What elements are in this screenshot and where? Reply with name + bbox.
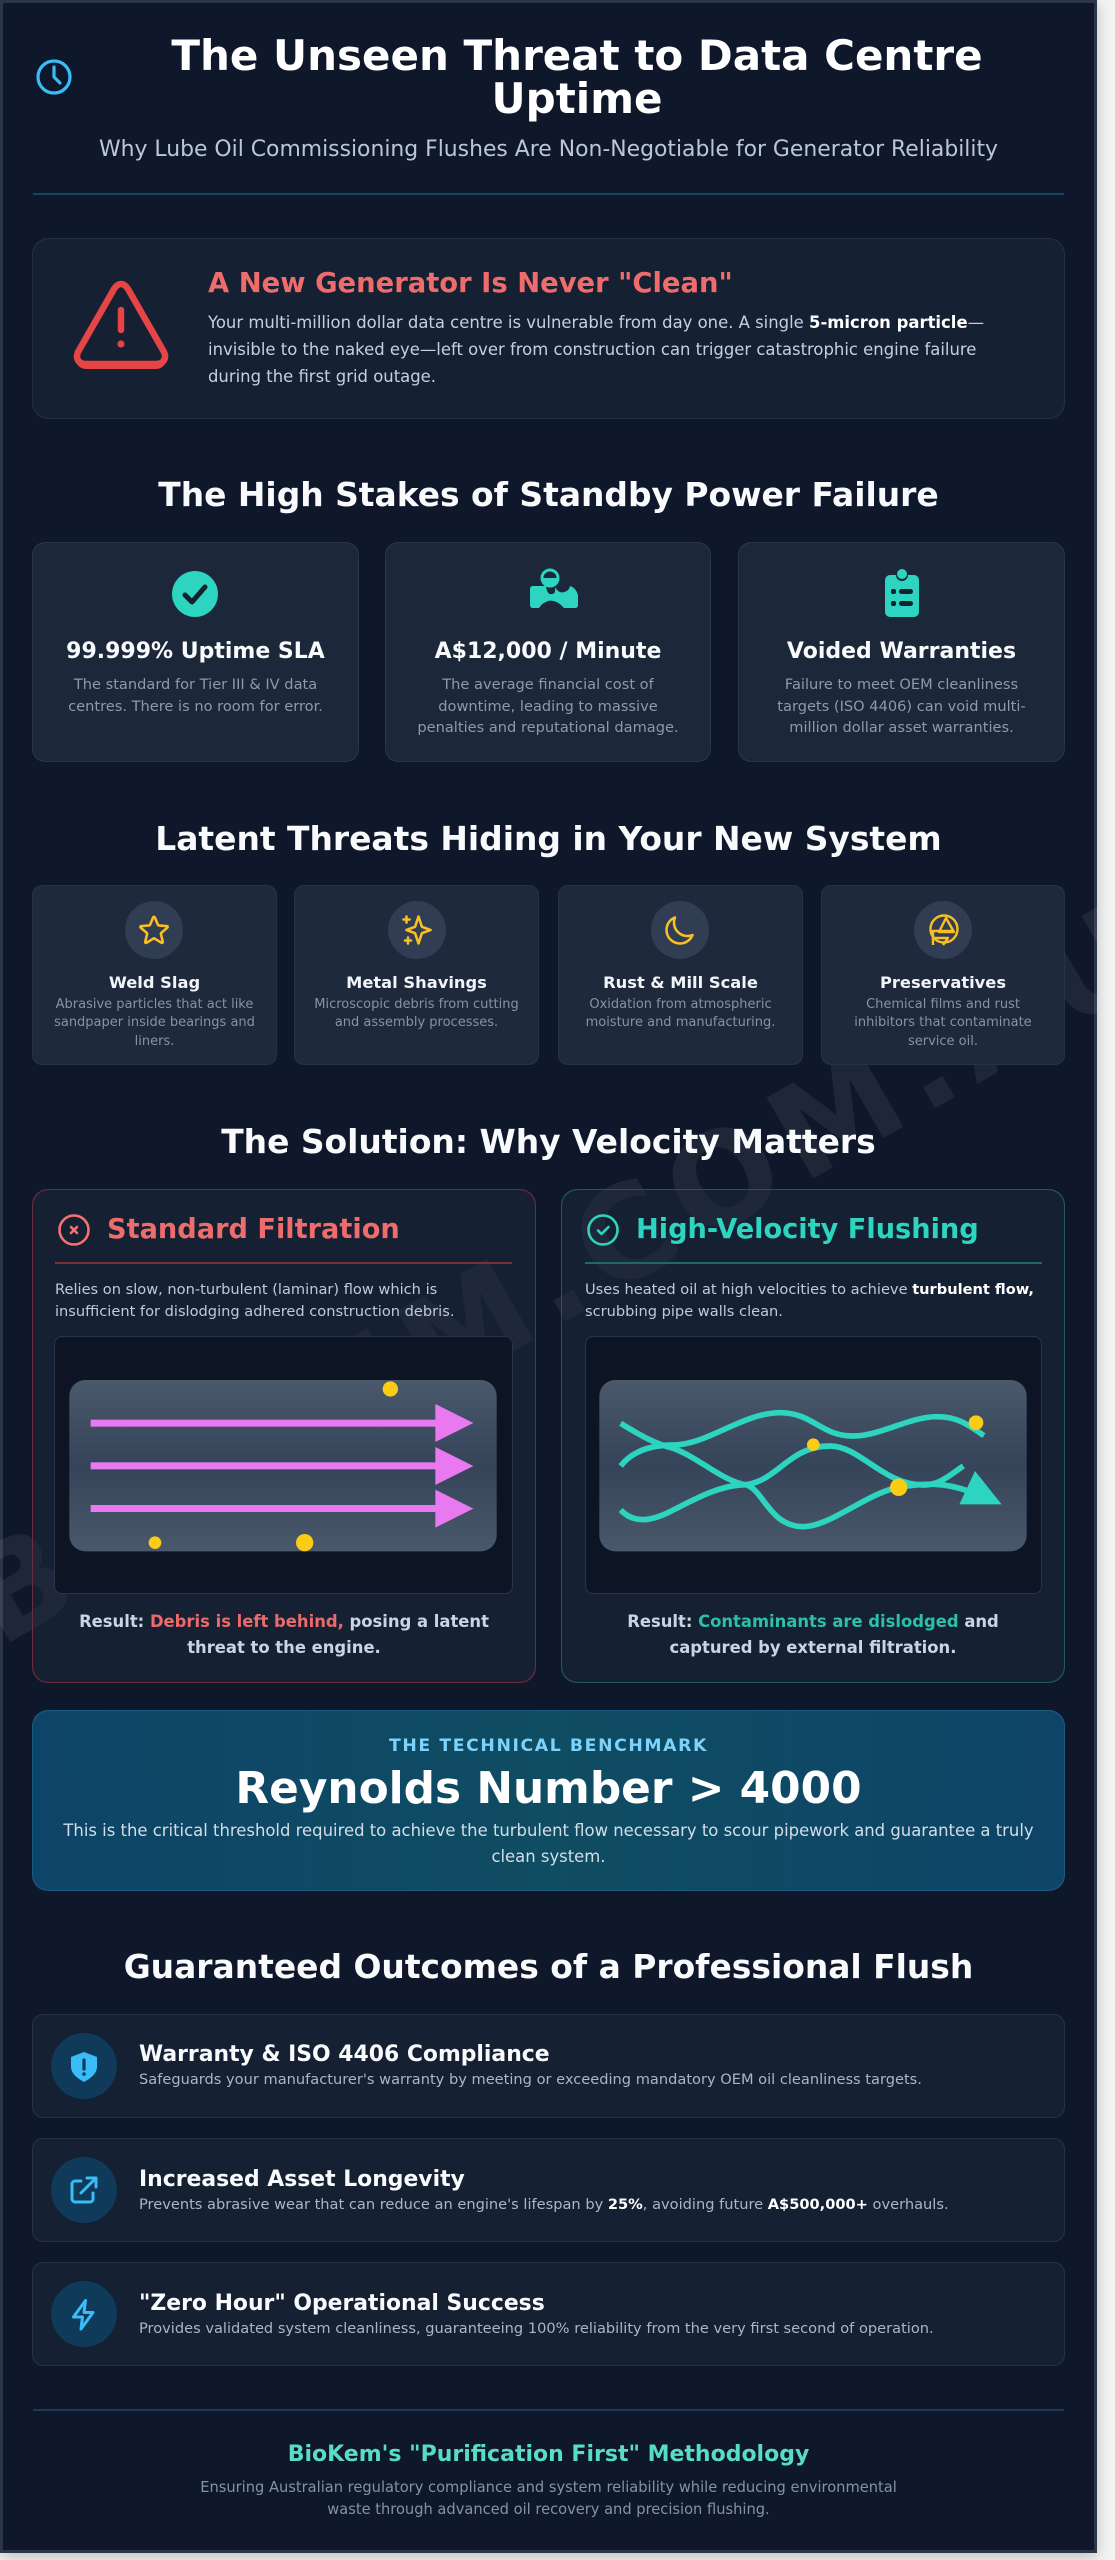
threat title: Preservatives [880,973,1006,992]
threat description: liners. [135,1034,174,1049]
panel: warranty outcome [33,2014,1064,2118]
result text: Result: Debris is left behind, posing a latent [79,1612,489,1631]
icon: x circle [58,1214,90,1246]
panel: preservatives card [822,885,1064,1065]
diagram: turbulent flow [585,1336,1042,1594]
stat description: centres. There is no room for error. [68,698,323,715]
footer text [200,2479,897,2518]
panel text: insufficient for dislodging adhered construction debris. [55,1303,454,1320]
panel heading: High-Velocity Flushing [636,1214,979,1245]
benchmark text [63,1821,1034,1866]
icon: moon [651,901,709,959]
benchmark value: Reynolds Number > 4000 [235,1763,862,1814]
heading: high stakes: The High Stakes of Standby Power Failure [158,475,939,514]
footer title: BioKem's "Purification First" Methodology [288,2442,809,2467]
stat title: Voided Warranties [787,639,1016,664]
alert text: Your multi-million dollar data centre is vulnerable from day one. A single 5-micron particle— [208,313,984,332]
panel: high-velocity flushing [562,1189,1064,1683]
icon: downtime machine [530,568,578,608]
footer text: Ensuring Australian regulatory compliance and system reliability while reducing environmental [200,2479,897,2496]
stat description [68,676,323,715]
threat description: Oxidation from atmospheric [589,997,772,1012]
threat description: moisture and manufacturing. [586,1015,775,1030]
outcome text: Provides validated system cleanliness, guaranteeing 100% reliability from the very first second of operation. [139,2320,934,2337]
panel text: Relies on slow, non-turbulent (laminar) flow which is [55,1281,437,1298]
icon: check circle outline [587,1214,619,1246]
panel text [55,1281,454,1320]
outcome title: Warranty & ISO 4406 Compliance [139,2042,550,2067]
result text [79,1612,489,1657]
threat description [314,997,519,1030]
threat description [586,997,775,1030]
outcome text: Prevents abrasive wear that can reduce an engine's lifespan by 25%, avoiding future A$500,000+ overhauls. [139,2196,949,2213]
panel text [585,1281,1034,1320]
heading: latent threats: Latent Threats Hiding in Your New System [155,819,942,858]
stat description: million dollar asset warranties. [789,719,1014,736]
stat title: 99.999% Uptime SLA [66,639,325,664]
panel: alert [33,238,1064,419]
title: The Unseen Threat to Data Centre [171,31,983,80]
threat title: Weld Slag [109,973,200,992]
icon: clipboard [885,569,919,617]
panel: voided warranties card [739,542,1064,762]
threat description: sandpaper inside bearings and [54,1015,255,1030]
threat title: Rust & Mill Scale [603,973,758,992]
footer [33,2409,1064,2518]
alert text: invisible to the naked eye—left over from construction can trigger catastrophic engine failure [208,340,976,359]
panel: technical benchmark [33,1710,1064,1891]
result text: threat to the engine. [187,1638,381,1657]
benchmark label: THE TECHNICAL BENCHMARK [389,1736,708,1756]
threat description: Microscopic debris from cutting [314,997,519,1012]
alert text [208,313,984,386]
stat description: downtime, leading to massive [438,698,658,715]
outcome text: Safeguards your manufacturer's warranty by meeting or exceeding mandatory OEM oil cleanliness targets. [139,2071,922,2088]
panel text: scrubbing pipe walls clean. [585,1303,783,1320]
outcome title: "Zero Hour" Operational Success [139,2291,545,2316]
stat description: targets (ISO 4406) can void multi- [777,698,1026,715]
threat description [54,997,255,1049]
threat title: Metal Shavings [346,973,487,992]
diagram: laminar flow [54,1336,513,1594]
panel: zero hour outcome [33,2262,1064,2366]
icon: check circle [172,571,218,617]
icon: clock [36,59,72,95]
panel: rust and mill scale card [559,885,802,1065]
stat description: The average financial cost of [442,676,654,693]
threat description: Abrasive particles that act like [56,997,253,1012]
heading: guaranteed outcomes: Guaranteed Outcomes of a Professional Flush [124,1947,973,1986]
threat description [854,997,1032,1049]
icon: star [125,901,183,959]
panel: downtime cost card [386,542,710,762]
panel heading: Standard Filtration [107,1214,400,1245]
stat title: A$12,000 / Minute [435,639,661,664]
threat description: service oil. [908,1034,978,1049]
footer text: waste through advanced oil recovery and precision flushing. [327,2501,770,2518]
stat description [417,676,679,736]
panel text: Uses heated oil at high velocities to achieve turbulent flow, [585,1281,1034,1298]
subtitle: Why Lube Oil Commissioning Flushes Are Non-Negotiable for Generator Reliability [99,137,998,162]
header [33,31,1064,195]
threat description: inhibitors that contaminate [854,1015,1032,1030]
panel: standard filtration [33,1189,535,1683]
alert heading: A New Generator Is Never "Clean" [208,268,733,299]
result text [627,1612,999,1657]
stat description: The standard for Tier III & IV data [74,676,317,693]
icon: external link [51,2157,117,2223]
result text: captured by external filtration. [670,1638,956,1657]
stat description: penalties and reputational damage. [417,719,679,736]
title [171,31,983,123]
panel: longevity outcome [33,2138,1064,2242]
icon: shield [51,2033,117,2099]
stat description: Failure to meet OEM cleanliness [785,676,1018,693]
icon: sparkles [388,901,446,959]
panel: metal shavings card [295,885,538,1065]
title: Uptime [492,74,662,123]
icon: garbled globe [914,901,972,959]
icon: bolt [51,2281,117,2347]
benchmark text: clean system. [491,1847,606,1866]
panel: uptime SLA card [33,542,358,762]
panel: weld slag card [33,885,276,1065]
threat description: and assembly processes. [335,1015,498,1030]
alert text: during the first grid outage. [208,367,436,386]
outcome title: Increased Asset Longevity [139,2167,465,2192]
threat description: Chemical films and rust [866,997,1020,1012]
benchmark text: This is the critical threshold required to achieve the turbulent flow necessary to scour pipework and guarantee a truly [63,1821,1034,1840]
result text: Result: Contaminants are dislodged and [627,1612,999,1631]
icon: warning triangle [74,280,168,369]
heading: the solution: The Solution: Why Velocity Matters [221,1122,876,1161]
stat description [777,676,1026,736]
